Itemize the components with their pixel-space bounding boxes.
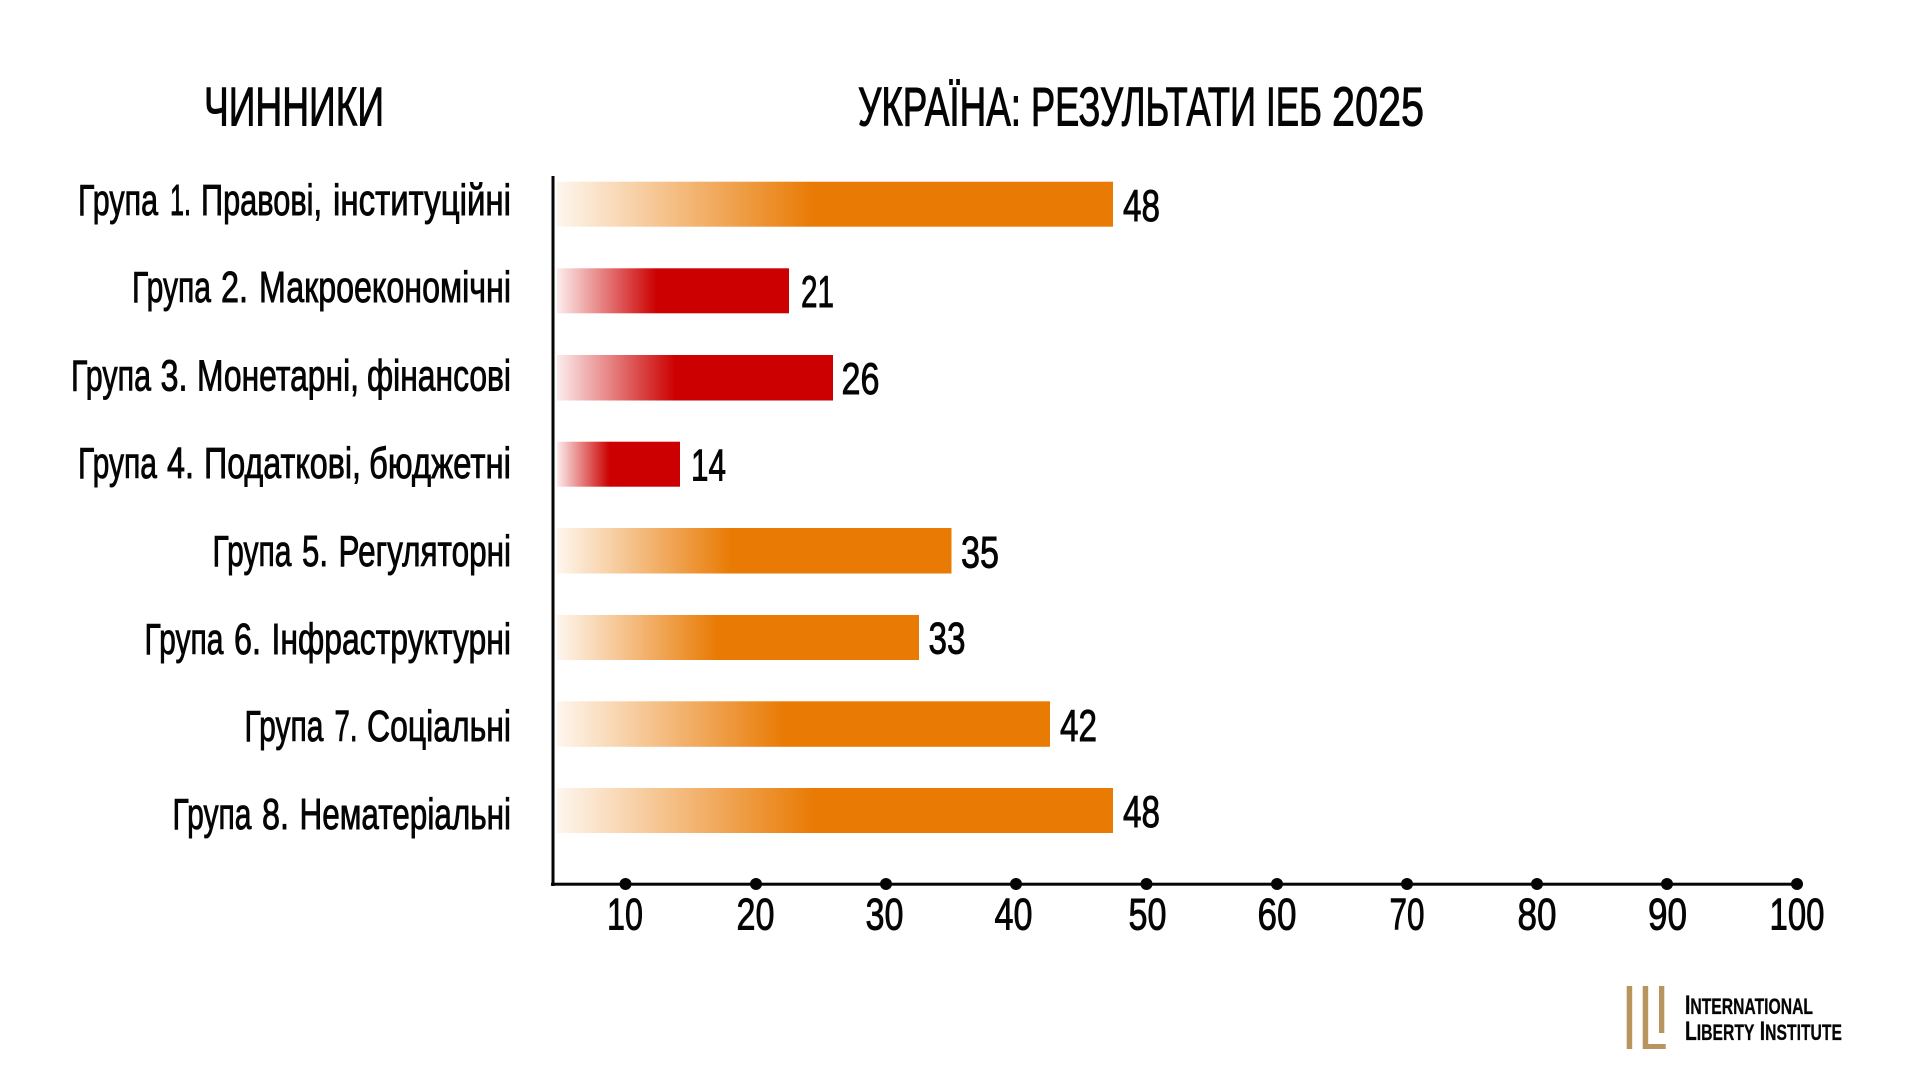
label: group 2: 2. — [221, 263, 248, 312]
axis labels: 50 — [1128, 890, 1166, 940]
vertical axis — [552, 176, 554, 886]
logo mark — [1627, 986, 1666, 1049]
label: group 6: 6. — [234, 615, 261, 664]
label: group 4: Податкові, — [204, 439, 361, 488]
bar: group 6 — [557, 615, 919, 660]
category labels — [71, 176, 511, 839]
axis ticks — [620, 878, 1803, 890]
label: group 1: інституційні — [333, 176, 511, 225]
axis labels — [607, 890, 1824, 940]
value: group 1: 48 — [1123, 182, 1160, 231]
label: group 3: Група — [71, 352, 151, 400]
label: group 4: 4. — [167, 439, 194, 488]
axis labels: 40 — [994, 890, 1032, 940]
label: group 4: бюджетні — [369, 439, 511, 488]
logo: International Liberty Institute — [1627, 986, 1842, 1049]
value: group 3: 26 — [842, 355, 880, 404]
label: group 5: 5. — [302, 527, 328, 576]
logo wordmark: LIBERTY INSTITUTE — [1685, 1016, 1842, 1046]
value: group 6: 33 — [928, 614, 966, 664]
heading: chart title: 2025 — [1332, 76, 1424, 138]
bar: group 2 — [557, 268, 789, 313]
value: group 5: 35 — [961, 528, 999, 578]
value: group 8: 48 — [1123, 788, 1160, 837]
axis labels: 100 — [1770, 890, 1824, 940]
heading: chart title: ІЕБ — [1266, 76, 1322, 138]
bar: group 1 — [557, 182, 1113, 227]
label: group 1: Правові, — [201, 176, 322, 225]
label: group 5: Регуляторні — [338, 527, 511, 576]
label: group 7: 7. — [334, 702, 358, 751]
axis labels: 10 — [607, 890, 643, 940]
axis labels: 30 — [866, 890, 904, 940]
logo wordmark — [1685, 990, 1842, 1046]
horizontal axis — [551, 883, 1797, 886]
label: group 1: Група — [78, 176, 158, 225]
label: group 4: Група — [78, 439, 157, 488]
bar chart — [557, 182, 1160, 837]
axis labels: 80 — [1518, 890, 1556, 940]
bar: group 3 — [557, 355, 833, 400]
bar: group 7 — [557, 701, 1050, 747]
value: group 2: 21 — [801, 268, 834, 317]
label: group 7: Група — [244, 702, 324, 751]
value: group 7: 42 — [1060, 702, 1097, 751]
label: group 3: фінансові — [367, 352, 511, 400]
bar: group 4 — [557, 442, 680, 487]
heading: chart title: РЕЗУЛЬТАТИ — [1031, 76, 1256, 138]
label: group 3: Монетарні, — [197, 352, 359, 400]
bar: group 8 — [557, 788, 1113, 833]
label: group 1: 1. — [170, 176, 191, 225]
axes — [551, 176, 1824, 940]
label: group 8: Група — [172, 790, 252, 839]
logo wordmark: INTERNATIONAL — [1685, 990, 1813, 1020]
label: group 8: 8. — [262, 790, 289, 839]
value: group 4: 14 — [691, 442, 726, 490]
label: group 5: Група — [212, 527, 292, 576]
axis labels: 90 — [1648, 890, 1687, 940]
label: group 2: Макроекономічні — [259, 263, 511, 312]
label: group 3: 3. — [160, 352, 188, 400]
label: group 6: Група — [144, 615, 224, 664]
axis labels: 70 — [1390, 890, 1424, 940]
heading: factors: ЧИННИКИ — [204, 76, 384, 138]
axis labels: 20 — [736, 890, 774, 940]
axis labels: 60 — [1258, 890, 1296, 940]
bar: group 5 — [557, 528, 952, 574]
heading: chart title: УКРАЇНА: — [858, 76, 1021, 138]
label: group 8: Нематеріальні — [300, 790, 511, 839]
label: group 7: Соціальні — [367, 702, 511, 751]
label: group 6: Інфраструктурні — [272, 615, 511, 664]
label: group 2: Група — [132, 263, 211, 312]
